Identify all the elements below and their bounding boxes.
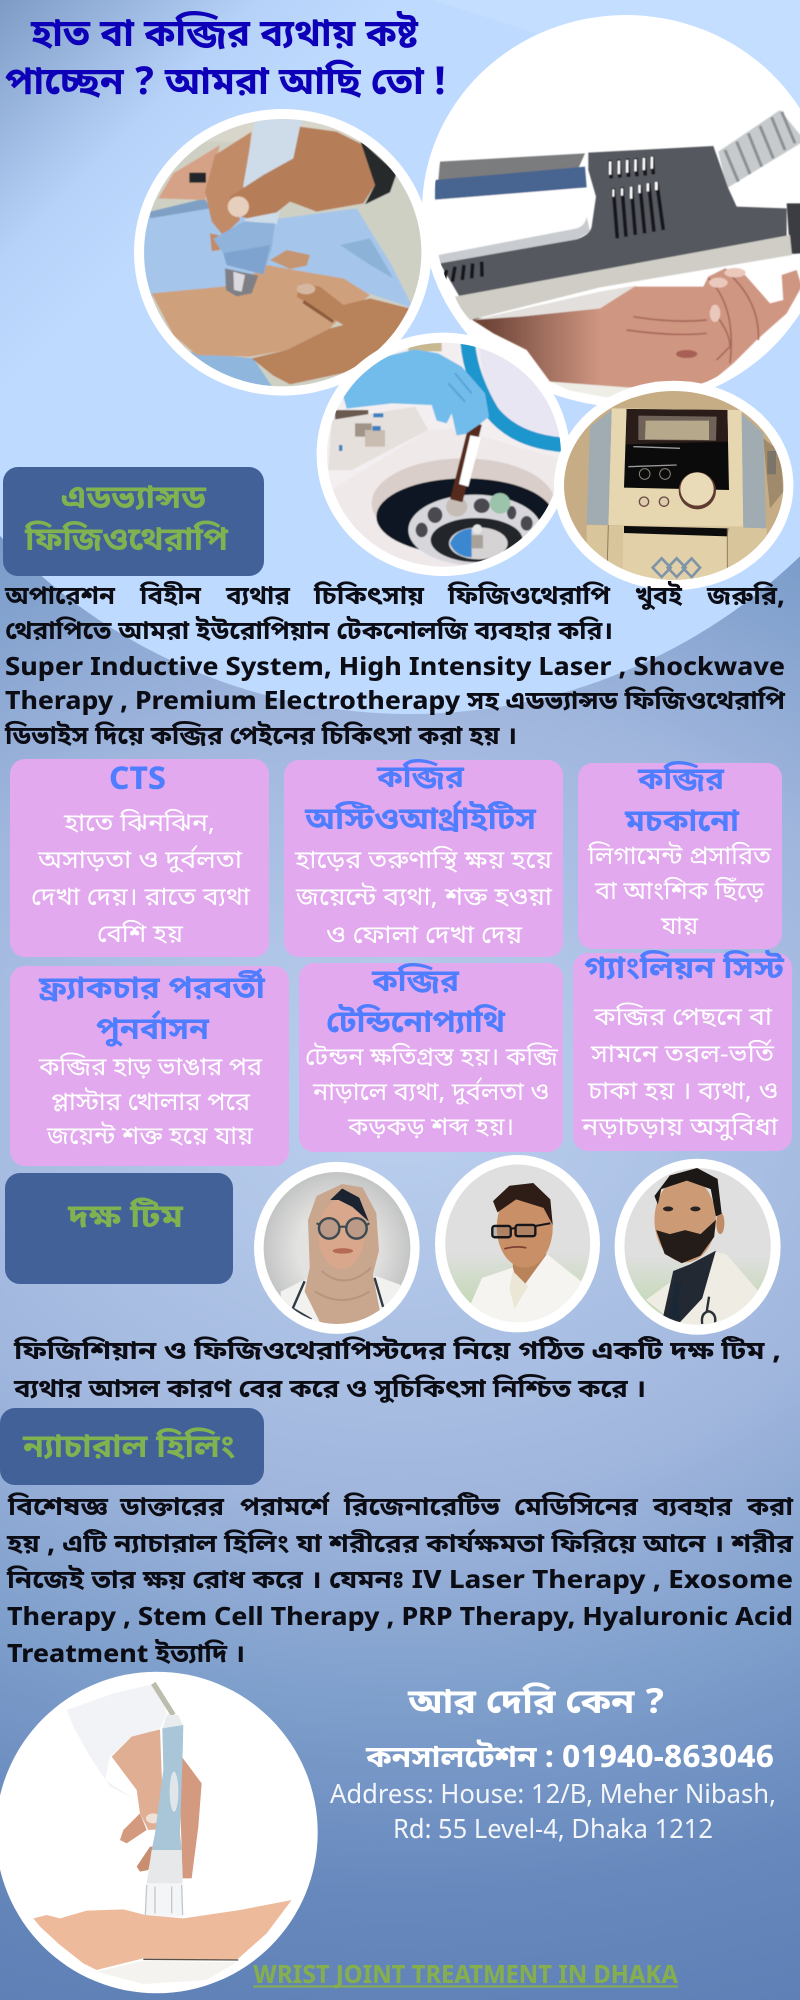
card: CTS: বেশি হয়	[97, 919, 183, 953]
text block: team description	[13, 1336, 781, 1408]
card: ganglion cyst: গ্যাংলিয়ন সিস্ট	[584, 949, 785, 991]
photo: electrotherapy device	[554, 381, 797, 590]
title: পাচ্ছেন ? আমরা আছি তো !	[5, 59, 446, 110]
portrait: female doctor	[254, 1162, 420, 1334]
card: post-fracture rehabilitation: ফ্র্যাকচার পরবর্তী	[38, 966, 266, 1011]
call to action: আর দেরি কেন ?	[407, 1681, 665, 1727]
text block: natural healing description: Therapy , Stem Cell Therapy , PRP Therapy, Hyaluronic Acid	[7, 1603, 793, 1636]
heading button: skilled team	[5, 1173, 233, 1284]
heading button: skilled team: দক্ষ টিম	[67, 1198, 184, 1241]
heading button: advanced physiotherapy: এডভ্যান্সড	[61, 480, 207, 522]
card: wrist tendinopathy: নাড়ালে ব্যথা, দুর্বলতা ও	[312, 1076, 549, 1111]
card: ganglion cyst: চাকা হয় । ব্যথা, ও	[587, 1077, 778, 1110]
address: Address: House: 12/B, Meher Nibash,	[330, 1779, 776, 1814]
card: wrist sprain: বা আংশিক ছিঁড়ে	[594, 876, 765, 910]
card: CTS	[10, 759, 269, 957]
footer link: WRIST JOINT TREATMENT IN DHAKA	[253, 1961, 678, 1994]
card: CTS: হাতে ঝিনঝিন,	[63, 808, 215, 842]
title	[5, 11, 446, 110]
card: wrist osteoarthritis: হাড়ের তরুণাস্থি ক্ষয় হয়ে	[294, 845, 552, 879]
text block: natural healing description: মেডিসিনের	[514, 1492, 639, 1526]
card: wrist sprain: কব্জির	[637, 760, 724, 802]
card: wrist osteoarthritis: ও ফোলা দেখা দেয়	[326, 921, 522, 954]
text block: natural healing description: হয় , এটি ন্যাচারাল হিলিং যা শরীরের কার্যক্ষমতা ফিরিয়ে আনে । শরীর	[6, 1528, 794, 1563]
portrait: bearded doctor	[615, 1159, 781, 1335]
heading button: natural healing	[0, 1408, 264, 1485]
card: ganglion cyst: নড়াচড়ায় অসুবিধা	[581, 1112, 778, 1146]
text block: physiotherapy description: থেরাপিতে আমরা ইউরোপিয়ান টেকনোলজি ব্যবহার করি।	[5, 616, 613, 650]
text block: physiotherapy description: Super Inductive System, High Intensity Laser , Shockwave	[5, 653, 785, 686]
text block: physiotherapy description	[4, 581, 786, 755]
text block: team description: ফিজিশিয়ান ও ফিজিওথেরাপিস্টদের নিয়ে গঠিত একটি দক্ষ টিম ,	[13, 1336, 781, 1370]
card: wrist osteoarthritis: কব্জির	[376, 758, 464, 800]
card: wrist tendinopathy: কব্জির	[371, 962, 459, 1004]
text block: physiotherapy description: ব্যথার	[225, 582, 291, 615]
card: wrist osteoarthritis: জয়েন্টে ব্যথা, শক্ত হওয়া	[295, 882, 552, 916]
card: post-fracture rehabilitation: কব্জির হাড় ভাঙার পর	[38, 1052, 263, 1086]
card: wrist tendinopathy: কড়কড় শব্দ হয়।	[347, 1113, 514, 1146]
text block: natural healing description: ডাক্তারের	[119, 1493, 225, 1526]
text block: natural healing description: বিশেষজ্ঞ	[7, 1492, 109, 1526]
card: CTS: দেখা দেয়। রাতে ব্যথা	[31, 883, 250, 916]
title: হাত বা কব্জির ব্যথায় কষ্ট	[30, 11, 419, 62]
card: wrist tendinopathy: টেন্ডন ক্ষতিগ্রস্ত হয়। কব্জি	[305, 1042, 559, 1076]
text block: physiotherapy description: ডিভাইস দিয়ে কব্জির পেইনের চিকিৎসা করা হয় ।	[4, 721, 517, 755]
card: ganglion cyst: কব্জির পেছনে বা	[593, 1002, 772, 1036]
card: CTS: CTS	[109, 761, 166, 802]
text block: team description: ব্যথার আসল কারণ বের করে ও সুচিকিৎসা নিশ্চিত করে ।	[13, 1374, 646, 1408]
text block: natural healing description: নিজেই তার ক্ষয় রোধ করে । যেমনঃ IV Laser Therapy , Exosome	[6, 1565, 793, 1599]
text block: natural healing description: রিজেনারেটিভ	[343, 1492, 500, 1526]
text block: physiotherapy description: Therapy , Premium Electrotherapy সহ এডভ্যান্সড ফিজিওথেরাপি	[5, 686, 786, 720]
card: wrist osteoarthritis	[284, 758, 563, 957]
card: wrist osteoarthritis: অস্টিওআর্থ্রাইটিস	[304, 799, 537, 842]
text block: physiotherapy description: চিকিৎসায়	[313, 581, 425, 615]
text block: natural healing description: Treatment ইত্যাদি ।	[7, 1639, 245, 1673]
card: wrist tendinopathy: টেন্ডিনোপ্যাথি	[326, 1003, 505, 1045]
text block: natural healing description: করা	[746, 1493, 794, 1526]
card: post-fracture rehabilitation: প্লাস্টার খোলার পরে	[51, 1087, 251, 1121]
card: wrist sprain: লিগামেন্ট প্রসারিত	[587, 841, 771, 875]
text block: physiotherapy description: বিহীন	[139, 581, 201, 615]
card: wrist sprain: মচকানো	[624, 803, 740, 844]
text block: physiotherapy description: অপারেশন	[4, 582, 115, 615]
text block: natural healing description: পরামর্শে	[240, 1491, 330, 1526]
heading button: natural healing: ন্যাচারাল হিলিং	[22, 1428, 235, 1471]
heading button: advanced physiotherapy	[3, 467, 264, 576]
card: post-fracture rehabilitation	[10, 966, 289, 1166]
text block: physiotherapy description: জরুরি,	[706, 581, 785, 615]
text block: natural healing description	[6, 1491, 794, 1673]
card: ganglion cyst	[573, 949, 792, 1151]
text block: physiotherapy description: খুবই	[635, 581, 683, 615]
card: wrist sprain	[578, 760, 782, 949]
photo: shockwave on wrist	[134, 109, 431, 396]
text block: physiotherapy description: ফিজিওথেরাপি	[447, 581, 611, 615]
card: CTS: অসাড়তা ও দুর্বলতা	[37, 844, 242, 879]
consultation phone number: কনসালটেশন : 01940-863046	[365, 1739, 774, 1780]
address	[330, 1779, 776, 1849]
text block: natural healing description: ব্যবহার	[652, 1493, 733, 1526]
card: wrist tendinopathy	[299, 962, 563, 1152]
card: post-fracture rehabilitation: জয়েন্ট শক্ত হয়ে যায়	[46, 1121, 253, 1155]
address: Rd: 55 Level-4, Dhaka 1212	[393, 1814, 713, 1849]
card: post-fracture rehabilitation: পুনর্বাসন	[96, 1009, 210, 1052]
photo: laser handpiece on forearm	[0, 1672, 318, 1993]
photo: handheld device on wrist	[422, 15, 800, 407]
card: wrist sprain: যায়	[660, 912, 698, 945]
call to action	[330, 1681, 776, 1849]
heading button: advanced physiotherapy: ফিজিওথেরাপি	[24, 521, 228, 564]
photo: centrifuge and blood sample	[317, 333, 570, 576]
portrait: male doctor with glasses	[435, 1155, 600, 1332]
card: ganglion cyst: সামনে তরল-ভর্তি	[590, 1038, 774, 1073]
